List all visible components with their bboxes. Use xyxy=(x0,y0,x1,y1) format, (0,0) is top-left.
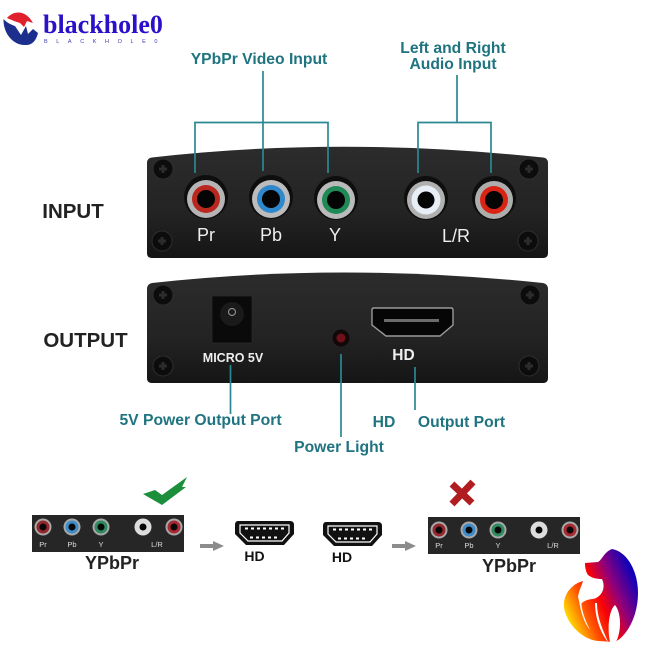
heading: Left and Right Audio Input: Left and Right xyxy=(400,40,506,57)
jack labels: Pr xyxy=(197,225,215,245)
jack: audio white xyxy=(404,176,448,220)
logo: blackhole0 brand: blackhole0 xyxy=(43,10,163,39)
caption: HD: HD xyxy=(373,414,395,431)
panel: YPbPr source left: Pb xyxy=(67,540,77,549)
caption: Power Light: Power Light xyxy=(294,439,385,456)
heading: YPbPr Video Input: YPbPr Video Input xyxy=(191,51,328,68)
jack labels: Y xyxy=(329,225,341,245)
label: YPbPr left: YPbPr xyxy=(85,553,139,573)
icon: HDMI left xyxy=(235,521,294,545)
dog highlights xyxy=(579,598,620,642)
power LED xyxy=(332,330,350,346)
panel: YPbPr target right: Y xyxy=(495,541,501,550)
jack: Y green xyxy=(314,176,358,220)
label: YPbPr right: YPbPr xyxy=(482,556,536,576)
panel: YPbPr target right: Pb xyxy=(464,541,474,550)
panel: YPbPr source left: L/R xyxy=(151,540,163,549)
heading: Left and Right Audio Input: Audio Input xyxy=(409,56,497,73)
panel: input device xyxy=(147,147,548,258)
HDMI port xyxy=(372,308,453,336)
jack: Pr red xyxy=(184,175,228,219)
caption: 5V Power Output Port: 5V Power Output Port xyxy=(119,412,282,429)
caption: Output Port: Output Port xyxy=(418,414,506,431)
panel: output device xyxy=(147,272,548,383)
label: OUTPUT: OUTPUT xyxy=(43,329,128,352)
jack labels: L/R xyxy=(442,226,470,246)
jack labels xyxy=(197,225,470,246)
screws: input xyxy=(152,159,539,251)
panel: YPbPr target right xyxy=(428,517,580,554)
arrow: left xyxy=(200,541,224,551)
power jack xyxy=(212,296,252,343)
jack labels: Pb xyxy=(260,225,282,245)
icon: green check xyxy=(143,477,187,505)
logo: blackhole0 brand: BLACKHOLE0 xyxy=(44,39,166,45)
label: MICRO 5V: MICRO 5V xyxy=(203,351,264,365)
label: HD on panel: HD xyxy=(392,347,415,364)
label: HD right: HD xyxy=(332,549,352,565)
jack: audio red xyxy=(472,176,516,220)
logo: blackhole0 brand xyxy=(3,10,166,45)
arrow: right xyxy=(392,541,416,551)
connector lines: input xyxy=(195,71,491,173)
screws: output xyxy=(153,285,540,376)
label: HD left: HD xyxy=(244,548,265,564)
logo: colourful dog mark xyxy=(564,549,638,642)
panel: YPbPr source left: Pr xyxy=(39,540,47,549)
panel: YPbPr source left xyxy=(32,515,184,552)
icon: HDMI right xyxy=(323,522,382,546)
connector lines: output xyxy=(230,354,415,437)
panel: YPbPr source left: Y xyxy=(98,540,104,549)
panel: YPbPr target right: L/R xyxy=(547,541,559,550)
jack: Pb blue xyxy=(249,175,293,219)
icon: red cross xyxy=(452,482,473,504)
panel: YPbPr target right: Pr xyxy=(435,541,443,550)
label: INPUT: INPUT xyxy=(42,200,104,223)
